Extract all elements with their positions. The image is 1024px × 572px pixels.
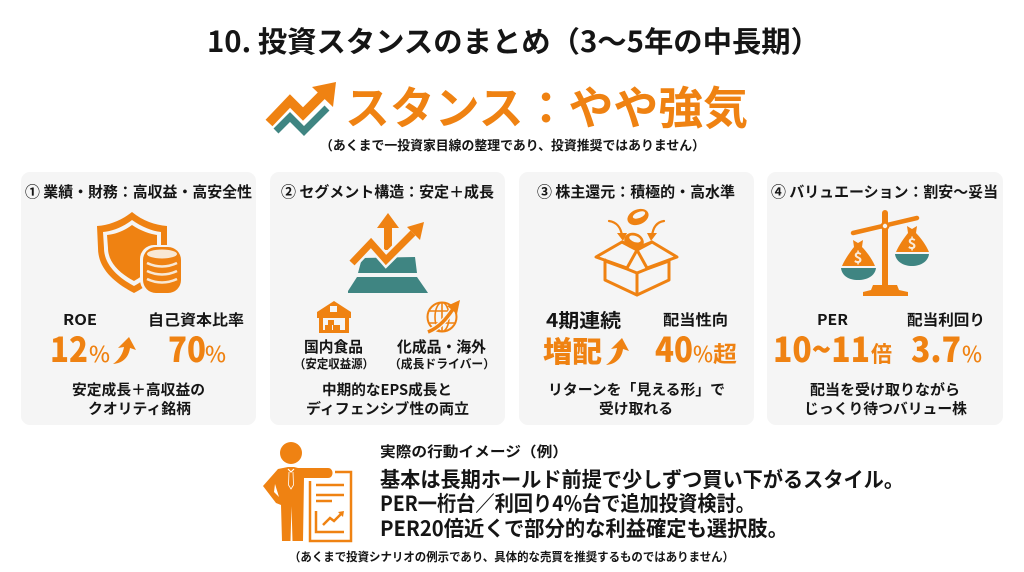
metric: payout ratio: 40 bbox=[655, 323, 693, 372]
metric: payout ratio: 配当性向 bbox=[663, 309, 728, 330]
card 3 summary: リターンを「見える形」で bbox=[548, 379, 725, 400]
icon: balance scale with money bags bbox=[841, 210, 929, 296]
card 3 summary: 受け取れる bbox=[599, 398, 673, 419]
card 1 summary: 安定成長＋高収益の bbox=[72, 379, 205, 400]
stance heading: スタンス：やや強気 bbox=[345, 72, 748, 137]
action details: 基本は長期ホールド前提で少しずつ買い下がるスタイル。 bbox=[380, 464, 904, 494]
panel 1: performance and financials bbox=[21, 172, 256, 425]
metric: equity ratio: % bbox=[205, 337, 226, 369]
segment: domestic food bbox=[294, 336, 374, 372]
metric: four consecutive dividend increases: 4期連続 bbox=[546, 306, 621, 333]
card 2 summary bbox=[306, 379, 469, 419]
metric: PER bbox=[773, 309, 892, 372]
metric: ROE: 12 bbox=[50, 323, 88, 372]
card 4 summary: 配当を受け取りながら bbox=[810, 379, 960, 400]
stance disclaimer: （あくまで一投資家目線の整理であり、投資推奨ではありません） bbox=[320, 135, 705, 154]
icon: shield with coins bbox=[97, 212, 183, 294]
panel 3: shareholder returns bbox=[519, 172, 754, 425]
metric: dividend yield: % bbox=[962, 337, 982, 369]
action details bbox=[380, 464, 904, 543]
metric: PER: 10~11 bbox=[773, 323, 870, 372]
card 2 background bbox=[270, 172, 505, 425]
metric: PER: 倍 bbox=[871, 337, 892, 369]
icon: balance scale with money bags: $ bbox=[854, 247, 862, 268]
metric: dividend yield: 3.7 bbox=[911, 323, 961, 372]
card 4 summary: じっくり待つバリュー株 bbox=[804, 398, 968, 419]
card 3 heading: ③ 株主還元：積極的・高水準 bbox=[537, 181, 735, 202]
action heading: 実際の行動イメージ（例） bbox=[380, 441, 568, 462]
metric: PER: PER bbox=[817, 309, 848, 330]
metric: ROE bbox=[50, 309, 136, 372]
metric: ROE: % bbox=[89, 337, 110, 369]
segment: domestic food: （安定収益源） bbox=[294, 355, 374, 372]
card 1 background bbox=[21, 172, 256, 425]
metric: dividend yield bbox=[907, 309, 985, 372]
icon: warehouse bbox=[317, 301, 351, 333]
title: 10. 投資スタンスのまとめ（3～5年の中長期） bbox=[207, 19, 820, 61]
metric: payout ratio: % bbox=[693, 337, 713, 369]
segment: chemicals and overseas bbox=[389, 336, 495, 372]
metric: four consecutive dividend increases: 増配 bbox=[543, 329, 602, 371]
icon: bars with growth arrows bbox=[348, 213, 428, 293]
card 1 heading: ① 業績・財務：高収益・高安全性 bbox=[25, 181, 252, 202]
card 3 summary bbox=[548, 379, 725, 419]
panel 4: valuation bbox=[767, 172, 1003, 425]
icon: balance scale with money bags: $ bbox=[908, 233, 916, 254]
scenario disclaimer: （あくまで投資シナリオの例示であり、具体的な売買を推奨するものではありません） bbox=[289, 548, 734, 565]
card 3 background bbox=[519, 172, 754, 425]
card 2 summary: ディフェンシブ性の両立 bbox=[306, 398, 469, 419]
icon: presenter with report bbox=[263, 442, 351, 541]
action details: PER20倍近くで部分的な利益確定も選択肢。 bbox=[380, 513, 788, 543]
card 2 summary: 中期的なEPS成長と bbox=[322, 379, 452, 400]
action details: PER一桁台／利回り4%台で追加投資検討。 bbox=[380, 488, 755, 518]
metric: ROE: ROE bbox=[63, 309, 97, 330]
icon: globe with arrow bbox=[428, 300, 460, 332]
segment: domestic food: 国内食品 bbox=[304, 336, 363, 357]
icon: stance trend arrow bbox=[269, 82, 336, 131]
card 2 heading: ② セグメント構造：安定＋成長 bbox=[281, 181, 494, 202]
metric: dividend yield: 配当利回り bbox=[907, 309, 985, 330]
metric: equity ratio bbox=[148, 309, 244, 372]
card 4 summary bbox=[804, 379, 968, 419]
icon: box with coins bbox=[596, 206, 677, 295]
metric: four consecutive dividend increases bbox=[543, 306, 629, 371]
segment: chemicals and overseas: （成長ドライバー） bbox=[389, 355, 495, 372]
metric: equity ratio: 70 bbox=[168, 323, 206, 372]
panel 2: segment structure bbox=[270, 172, 505, 425]
card 1 summary: クオリティ銘柄 bbox=[88, 398, 191, 419]
card 4 heading: ④ バリュエーション：割安～妥当 bbox=[771, 181, 998, 202]
card 1 summary bbox=[72, 379, 205, 419]
metric: payout ratio bbox=[655, 309, 737, 372]
segment: chemicals and overseas: 化成品・海外 bbox=[397, 336, 486, 357]
card 4 background bbox=[767, 172, 1003, 425]
metric: payout ratio: 超 bbox=[713, 337, 737, 369]
metric: equity ratio: 自己資本比率 bbox=[148, 309, 244, 330]
